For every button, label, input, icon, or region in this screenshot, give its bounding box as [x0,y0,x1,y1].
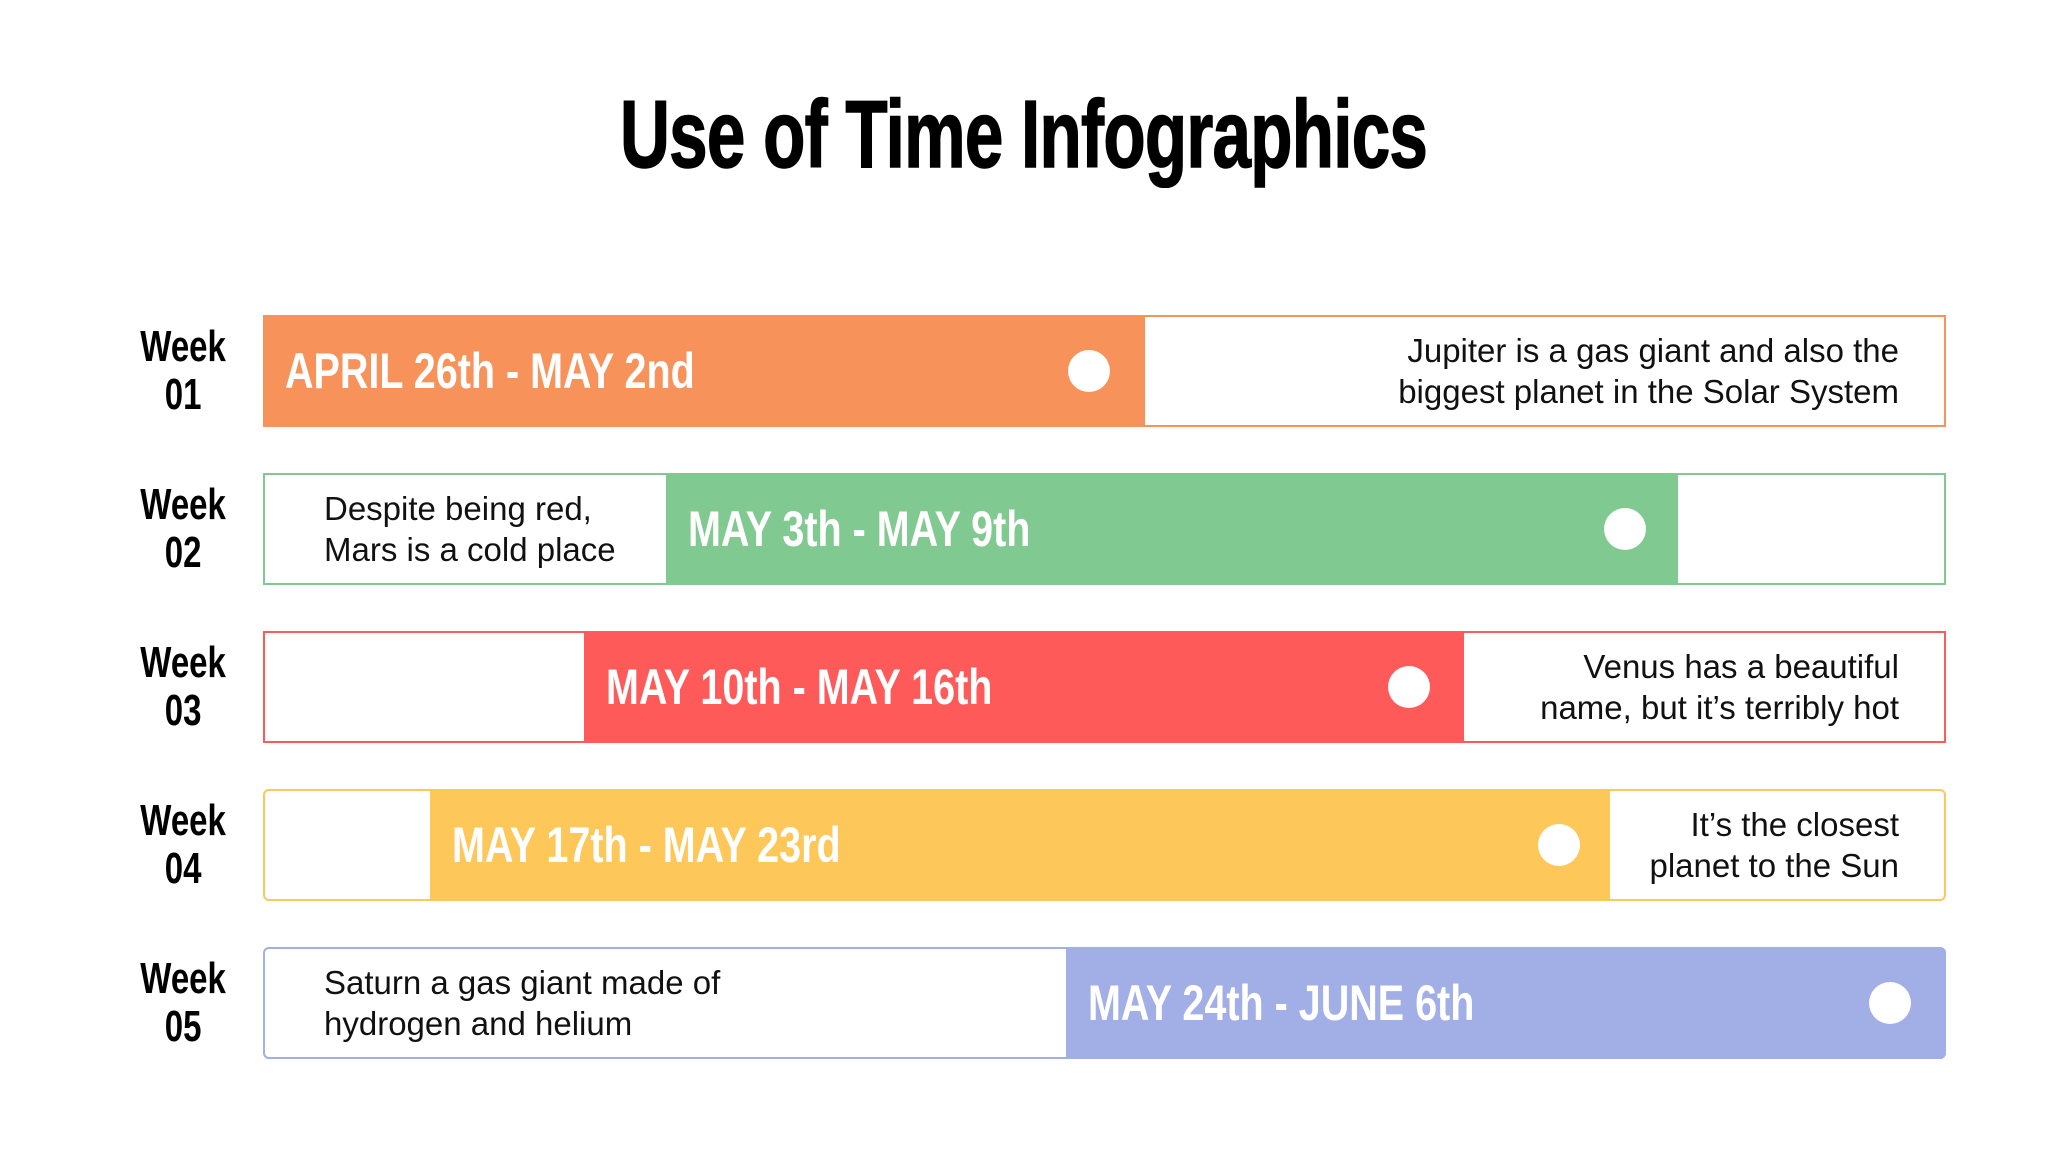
week label 05 [140,954,226,1051]
row 03 [263,631,1946,743]
row 02 [263,473,1946,585]
date bar 03: MAY 10th - MAY 16th [606,659,992,715]
week label 01: Week [140,322,226,371]
description 03 [1540,648,1899,726]
description 05: hydrogen and helium [324,1005,632,1042]
row 01 [263,315,1946,427]
description 02: Mars is a cold place [324,531,616,568]
date bar 05: MAY 24th - JUNE 6th [1088,975,1474,1031]
date bar 05 [1066,947,1946,1059]
week label 03: 03 [165,686,201,735]
description 05: Saturn a gas giant made of [324,964,720,1001]
week label 02: 02 [165,528,201,577]
date bar 02 [666,473,1678,585]
row 05 [263,947,1946,1059]
description 04 [1649,806,1899,884]
description 02: Despite being red, [324,490,592,527]
date bar 01 [263,315,1145,427]
date bar 02: MAY 3th - MAY 9th [688,501,1030,557]
description 05 [324,964,720,1042]
week label 02 [140,480,226,577]
week label 01: 01 [165,370,201,419]
date bar 04: MAY 17th - MAY 23rd [452,817,841,873]
title: Use of Time Infographics [620,81,1428,188]
week label 05: Week [140,954,226,1003]
week label 04: 04 [165,844,201,893]
description 01 [1398,332,1899,410]
description 01: biggest planet in the Solar System [1398,373,1899,410]
week label 05: 05 [165,1002,201,1051]
description 04: planet to the Sun [1649,847,1899,884]
date bar 01: APRIL 26th - MAY 2nd [285,343,695,399]
week label 04: Week [140,796,226,845]
date bar 04 [430,789,1610,901]
description 03: Venus has a beautiful [1583,648,1899,685]
description 04: It’s the closest [1690,806,1899,843]
description 02 [324,490,616,568]
row 04 [263,789,1946,901]
week label 04 [140,796,226,893]
description 03: name, but it’s terribly hot [1540,689,1899,726]
week label 02: Week [140,480,226,529]
date bar 03 [584,631,1464,743]
description 01: Jupiter is a gas giant and also the [1407,332,1899,369]
week label 01 [140,322,226,419]
week label 03 [140,638,226,735]
week label 03: Week [140,638,226,687]
